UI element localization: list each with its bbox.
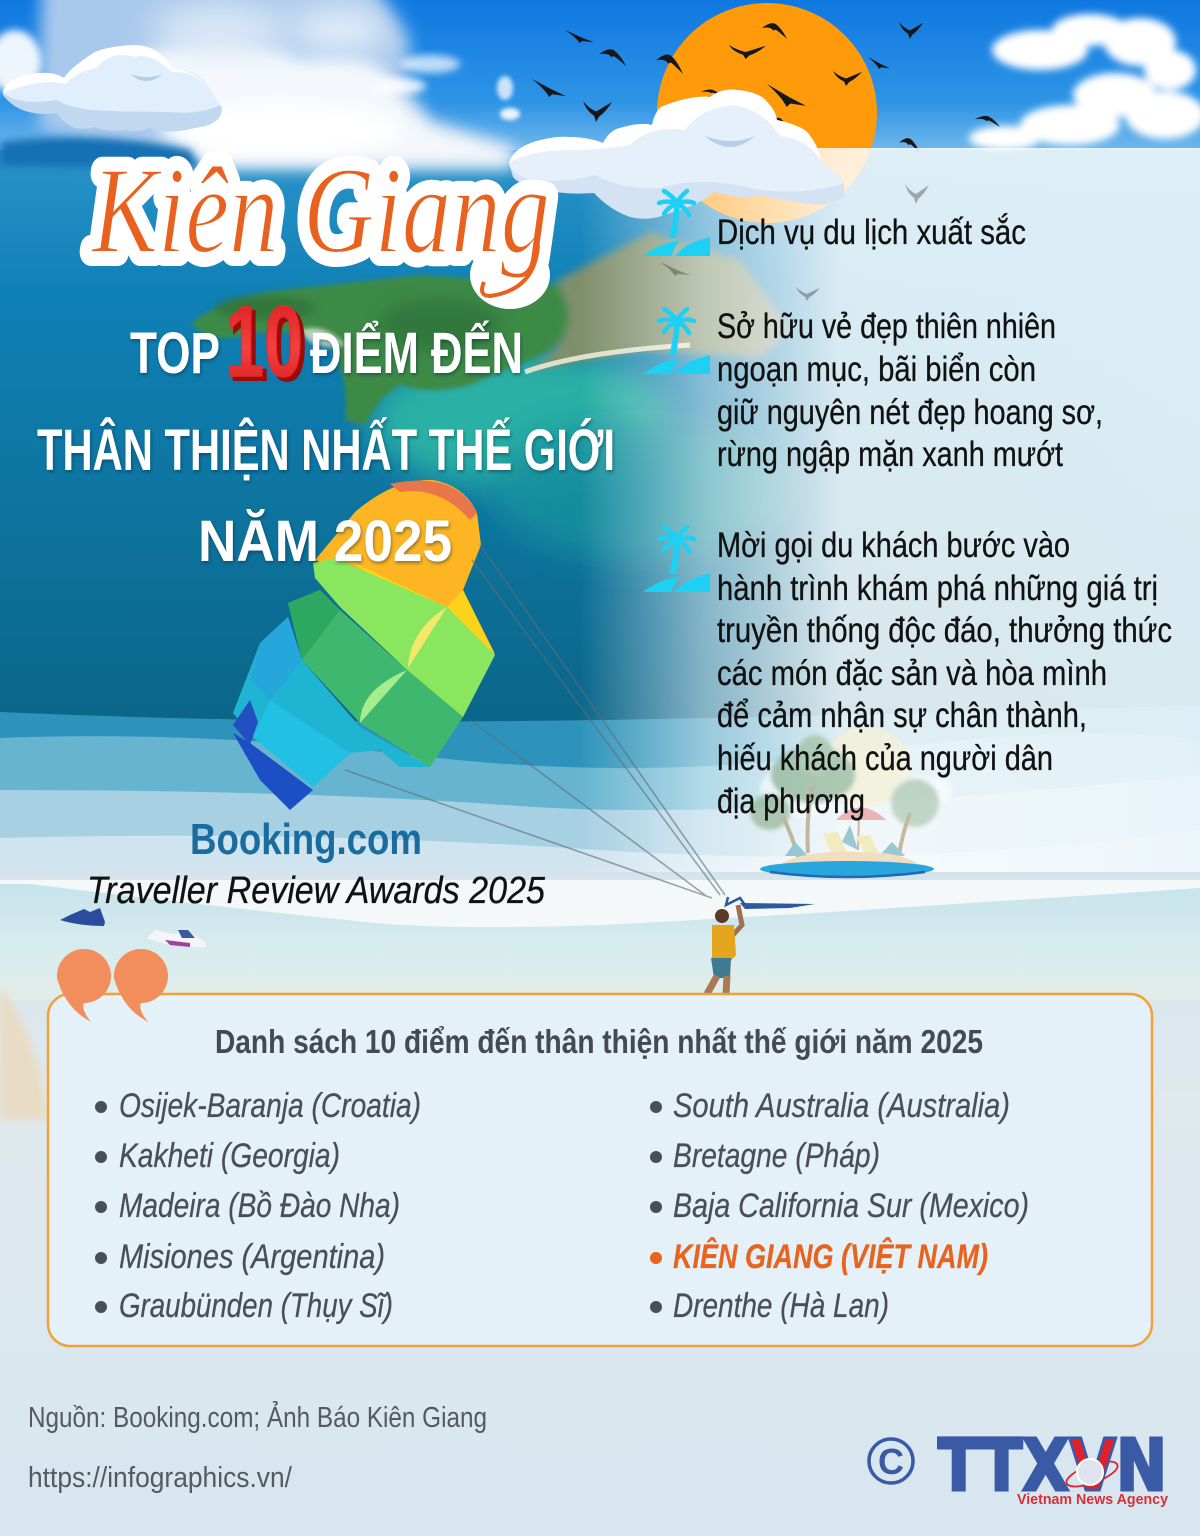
title: Kiên Giang (90, 142, 550, 309)
icon: copyright: C (878, 1441, 904, 1482)
faint birds under overlay (660, 184, 929, 301)
heading: top 10: TOP (130, 321, 220, 386)
cloud left (3, 45, 222, 132)
heading: năm 2025: NĂM 2025 (198, 509, 452, 574)
icon: quotation mark (57, 949, 168, 1022)
number 10: 10 (229, 290, 307, 402)
list: left column: Misiones (Argentina) (119, 1238, 385, 1276)
jet skis (60, 908, 206, 947)
list: left column: Osijek-Baranja (Croatia) (119, 1087, 421, 1125)
website: https://infographics.vn/ (28, 1462, 293, 1494)
big cloud left (40, 0, 515, 168)
icon: palm 1 (643, 191, 710, 256)
text: invitation: Mời gọi du khách bước vào (717, 526, 1070, 565)
text: nature: ngoạn mục, bãi biển còn (717, 350, 1036, 389)
text: nature (717, 307, 1103, 474)
list: right column: Bretagne (Pháp) (673, 1137, 880, 1175)
list: left column: Graubünden (Thụy Sĩ) (119, 1287, 393, 1325)
list: right column: Baja California Sur (Mexico) (673, 1187, 1029, 1225)
list heading: Danh sách 10 điểm đến thân thiện nhất thế giới năm 2025 (215, 1023, 983, 1060)
foam and sea strip (0, 880, 1200, 930)
text: nature: Sở hữu vẻ đẹp thiên nhiên (717, 307, 1056, 346)
birds (532, 22, 1000, 153)
sun (657, 3, 877, 223)
text: invitation (717, 526, 1172, 821)
dark band below clouds (0, 138, 200, 168)
heading: điểm đến: ĐIỂM ĐẾN (310, 321, 523, 386)
list: left column: Madeira (Bồ Đào Nha) (119, 1187, 400, 1225)
list: right column: KIÊN GIANG (VIỆT NAM) (673, 1238, 988, 1276)
text: service: Dịch vụ du lịch xuất sắc (717, 213, 1026, 252)
icon: palm 3 (643, 527, 710, 592)
text: booking.com: Booking.com (190, 815, 422, 864)
text: nature: rừng ngập mặn xanh mướt (717, 435, 1063, 474)
illustration: small island (750, 727, 953, 877)
wave bands (0, 705, 1200, 890)
parasailer (707, 897, 815, 994)
text: invitation: địa phương (717, 782, 865, 821)
logo: TTXVN: TTXVN (938, 1424, 1167, 1507)
right puffy clouds (969, 14, 1200, 150)
text: invitation: để cảm nhận sự chân thành, (717, 696, 1087, 735)
icon: palm 2 (643, 309, 710, 374)
parasail lines (345, 545, 725, 898)
small clouds (400, 55, 460, 73)
text: invitation: các món đặc sản và hòa mình (717, 654, 1107, 693)
text: nature: giữ nguyên nét đẹp hoang sơ, (717, 393, 1103, 432)
source: Nguồn: Booking.com; Ảnh Báo Kiên Giang (28, 1400, 487, 1434)
list: right column: South Australia (Australia) (673, 1087, 1010, 1125)
title: Kiên Giang: Kiên Giang (90, 142, 550, 279)
list: left column: Kakheti (Georgia) (119, 1137, 340, 1175)
list: right column: Drenthe (Hà Lan) (673, 1287, 889, 1325)
number 10: 10 (225, 286, 303, 398)
panel: translucent right overlay (580, 148, 1200, 872)
panel: list (48, 949, 1152, 1346)
text: awards: Traveller Review Awards 2025 (87, 870, 546, 912)
parasail canopy (233, 480, 495, 810)
title: Kiên Giang: Kiên Giang (90, 142, 550, 279)
heading: top 10 (130, 286, 307, 402)
icon: copyright (869, 1439, 913, 1483)
island (192, 275, 575, 425)
turquoise shallow water (370, 352, 670, 488)
logo: TTXVN: Vietnam News Agency (1017, 1492, 1168, 1508)
heading: thân thiện: THÂN THIỆN NHẤT THẾ GIỚI (37, 418, 615, 483)
list: left column (95, 1087, 421, 1325)
text: invitation: hiếu khách của người dân (717, 739, 1053, 778)
list: right column (650, 1087, 1029, 1325)
cloud centre (509, 90, 844, 219)
